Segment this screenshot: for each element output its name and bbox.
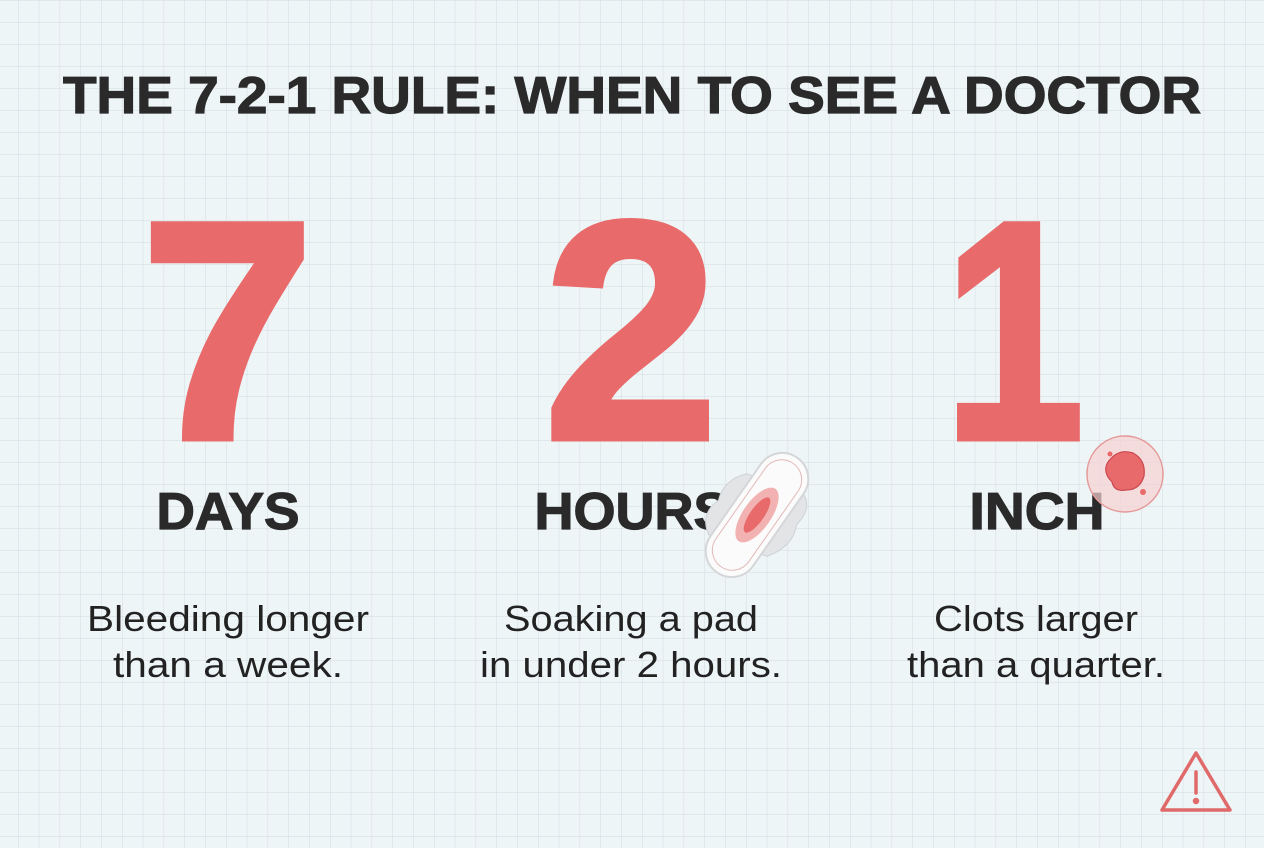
column: 2 hours (504, 157, 758, 639)
icon: warning (1162, 753, 1230, 810)
label: DAYS: DAYS (156, 483, 300, 541)
text: than a week. (113, 644, 343, 685)
icon: pad (682, 433, 831, 596)
icon: clot (1087, 436, 1163, 512)
label: HOURS: HOURS (534, 483, 730, 541)
label: INCH: INCH (970, 483, 1104, 541)
text: in under 2 hours. (480, 644, 782, 685)
description: days: Bleeding longer (87, 598, 369, 639)
big number 2: 2 (544, 157, 718, 504)
text: than a quarter. (907, 644, 1165, 685)
description: hours: Soaking a pad (504, 598, 758, 639)
big number 7: 7 (141, 157, 314, 504)
description: inch: Clots larger (934, 598, 1138, 639)
title: THE 7-2-1 RULE: WHEN TO SEE A DOCTOR (63, 67, 1201, 125)
big number 1: 1 (944, 157, 1084, 504)
column: 1 inch (934, 157, 1138, 639)
column: 7 days (87, 157, 369, 639)
